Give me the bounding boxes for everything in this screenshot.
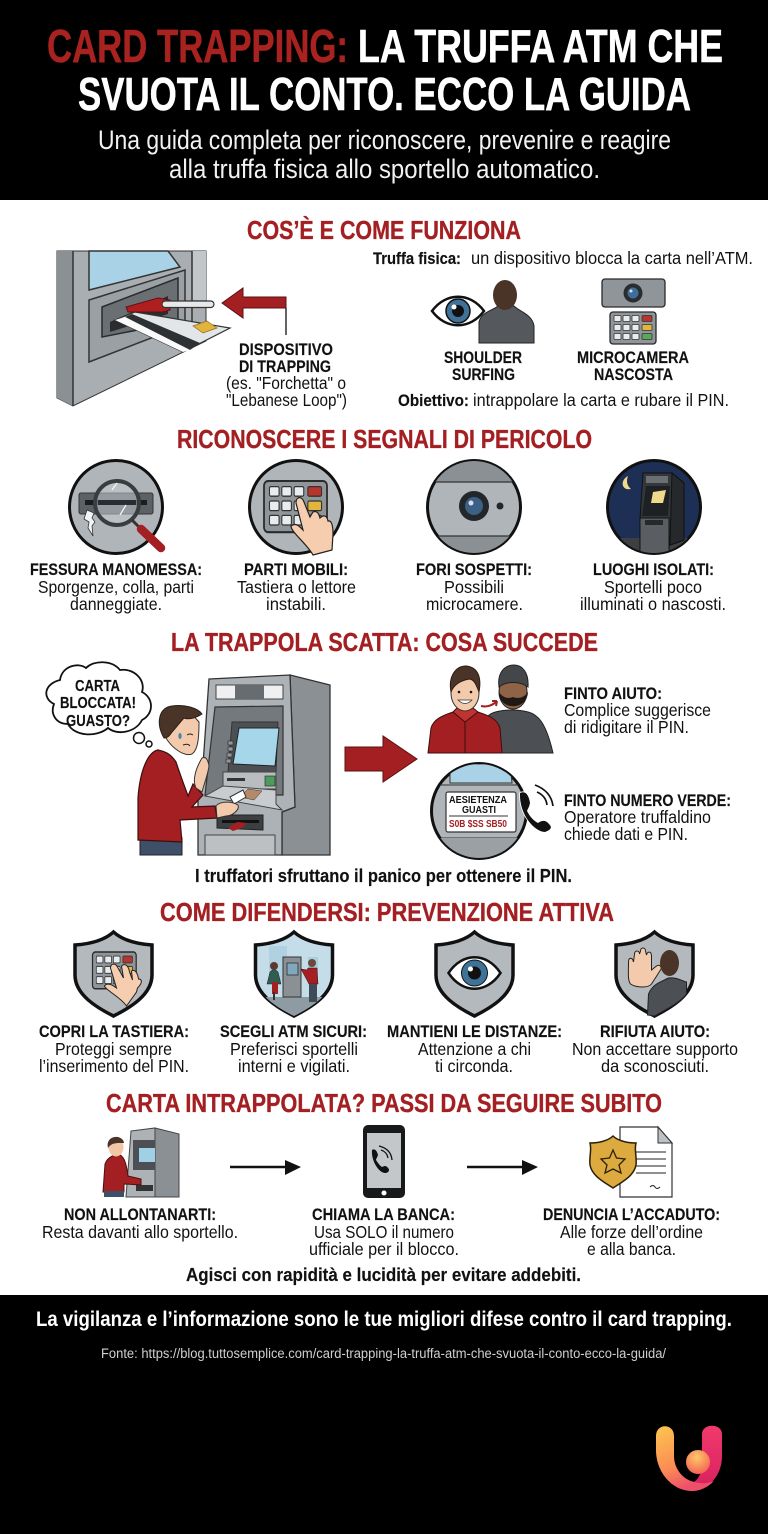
arrow: step 1 to 2 xyxy=(230,1160,301,1175)
icon: shield with keypad xyxy=(75,932,152,1016)
icon: fake assistance sticker: AESIETENZA xyxy=(449,795,507,806)
device label: "Lebanese Loop") xyxy=(226,390,347,410)
callout: thought bubble: BLOCCATA! xyxy=(60,695,136,712)
objective text: Obiettivo: xyxy=(398,391,469,410)
warning labels: Sporgenze, colla, parti xyxy=(38,577,194,597)
warning labels xyxy=(30,560,726,614)
device label: (es. "Forchetta" o xyxy=(226,373,346,393)
icon: ATM machine xyxy=(198,675,330,855)
panel: la trappola scatta xyxy=(46,627,731,886)
icon: phone xyxy=(520,785,553,832)
prevention labels: Proteggi sempre xyxy=(55,1039,172,1059)
icon: badge and report xyxy=(590,1127,672,1197)
heading: COME DIFENDERSI: PREVENZIONE ATTIVA xyxy=(160,897,614,927)
step labels xyxy=(42,1205,720,1259)
footer band xyxy=(0,1295,768,1534)
icon: keypad with finger xyxy=(250,460,342,555)
fake number text: Operatore truffaldino xyxy=(564,807,711,827)
icon: logo xyxy=(656,1426,722,1491)
device label xyxy=(226,340,347,410)
arrow: step 2 to 3 xyxy=(467,1160,538,1175)
icon: person at ATM xyxy=(103,1128,179,1197)
title: CARD TRAPPING: xyxy=(47,20,348,72)
fake number text: chiede dati e PIN. xyxy=(564,824,688,844)
warning labels: instabili. xyxy=(266,594,326,614)
prevention labels: COPRI LA TASTIERA: xyxy=(39,1022,189,1041)
icon: shield with safe ATM xyxy=(256,932,332,1017)
device label: DI TRAPPING xyxy=(239,357,331,376)
subtitle: Una guida completa per riconoscere, prevenire e reagire xyxy=(98,125,671,155)
helper text xyxy=(564,684,711,737)
device label: DISPOSITIVO xyxy=(239,340,333,359)
heading: RICONOSCERE I SEGNALI DI PERICOLO xyxy=(177,424,592,454)
objective text: intrappolare la carta e rubare il PIN. xyxy=(473,390,729,410)
callout: thought bubble: CARTA xyxy=(75,678,120,695)
prevention labels: SCEGLI ATM SICURI: xyxy=(220,1022,367,1041)
step labels: CHIAMA LA BANCA: xyxy=(312,1205,455,1224)
icon: fake assistance sticker: S0B $SS SB50 xyxy=(449,819,507,830)
helper text: FINTO AIUTO: xyxy=(564,684,662,703)
step labels: NON ALLONTANARTI: xyxy=(64,1205,216,1224)
step labels: Usa SOLO il numero xyxy=(314,1222,454,1242)
heading: COS’È E COME FUNZIONA xyxy=(247,215,521,245)
prevention labels: Attenzione a chi xyxy=(418,1039,531,1059)
panel: carta intrappolata xyxy=(42,1088,720,1285)
icon labels: NASCOSTA xyxy=(594,365,673,384)
icon: fake helper pair xyxy=(428,665,553,753)
callout: thought bubble xyxy=(46,662,152,747)
icon: worried person xyxy=(138,705,246,855)
panel: cos'è e come funziona xyxy=(57,215,753,410)
prevention labels: l’inserimento del PIN. xyxy=(39,1056,189,1076)
icon labels: SURFING xyxy=(452,365,515,384)
heading: LA TRAPPOLA SCATTA: COSA SUCCEDE xyxy=(171,627,598,657)
title xyxy=(47,20,723,120)
warning labels: FESSURA MANOMESSA: xyxy=(30,560,202,579)
fake number text: FINTO NUMERO VERDE: xyxy=(564,791,731,810)
warning labels: PARTI MOBILI: xyxy=(244,560,348,579)
subtitle: alla truffa fisica allo sportello automatico. xyxy=(169,154,600,184)
step labels: DENUNCIA L’ACCADUTO: xyxy=(543,1205,720,1224)
definition text: un dispositivo blocca la carta nell’ATM. xyxy=(471,248,753,268)
callout: thought bubble: GUASTO? xyxy=(66,713,130,730)
panel: come difendersi xyxy=(39,897,738,1076)
icon: eye and person xyxy=(432,280,534,343)
summary text: Agisci con rapidità e lucidità per evitare addebiti. xyxy=(186,1265,581,1285)
panel: riconoscere i segnali xyxy=(30,424,726,614)
header band xyxy=(0,0,768,200)
definition text: Truffa fisica: xyxy=(373,249,461,268)
step labels: Resta davanti allo sportello. xyxy=(42,1222,238,1242)
icon labels: SHOULDER xyxy=(444,348,522,367)
prevention labels xyxy=(39,1022,738,1076)
helper text: Complice suggerisce xyxy=(564,700,711,720)
warning labels: LUOGHI ISOLATI: xyxy=(593,560,714,579)
source: Fonte: https://blog.tuttosemplice.com/card-trapping-la-truffa-atm-che-svuota-il-conto-ecco-la-guida/ xyxy=(101,1346,666,1361)
warning labels: FORI SOSPETTI: xyxy=(416,560,532,579)
icon: card trapped in ATM slot xyxy=(57,251,230,406)
warning labels: Possibili xyxy=(444,577,504,597)
arrow: points to device xyxy=(222,288,286,335)
icon: smartphone call xyxy=(363,1125,405,1198)
step labels: e alla banca. xyxy=(587,1239,676,1259)
heading: CARTA INTRAPPOLATA? PASSI DA SEGUIRE SUBITO xyxy=(106,1088,662,1118)
step labels: Alle forze dell’ordine xyxy=(560,1222,703,1242)
icon: isolated ATM at night xyxy=(608,460,700,558)
icon: shield with eye xyxy=(436,932,513,1016)
icon: fake assistance sticker: GUASTI xyxy=(462,805,496,816)
warning labels: Sportelli poco xyxy=(604,577,702,597)
step labels: ufficiale per il blocco. xyxy=(309,1239,459,1259)
prevention labels: da sconosciuti. xyxy=(601,1056,709,1076)
icon: shield with raised hand xyxy=(616,932,693,1016)
icon: tampered slot under magnifier xyxy=(70,460,162,554)
icon: hidden camera and keypad xyxy=(602,279,665,344)
warning labels: microcamere. xyxy=(426,594,523,614)
prevention labels: interni e vigilati. xyxy=(238,1056,350,1076)
prevention labels: MANTIENI LE DISTANZE: xyxy=(387,1022,562,1041)
warning labels: danneggiate. xyxy=(70,594,162,614)
arrow: big red xyxy=(345,736,417,782)
prevention labels: Non accettare supporto xyxy=(572,1039,738,1059)
warning labels: Tastiera o lettore xyxy=(237,577,356,597)
fake number text xyxy=(564,791,731,844)
warning labels: illuminati o nascosti. xyxy=(580,594,726,614)
subtitle xyxy=(98,125,671,184)
helper text: di ridigitare il PIN. xyxy=(564,717,689,737)
icon: fake assistance sticker xyxy=(430,764,528,860)
summary text: I truffatori sfruttano il panico per ottenere il PIN. xyxy=(195,866,572,886)
icon labels xyxy=(444,348,689,384)
prevention labels: ti circonda. xyxy=(435,1056,513,1076)
icon: suspicious camera hole xyxy=(425,460,523,556)
prevention labels: Preferisci sportelli xyxy=(230,1039,358,1059)
prevention labels: RIFIUTA AIUTO: xyxy=(600,1022,710,1041)
icon labels: MICROCAMERA xyxy=(577,348,689,367)
